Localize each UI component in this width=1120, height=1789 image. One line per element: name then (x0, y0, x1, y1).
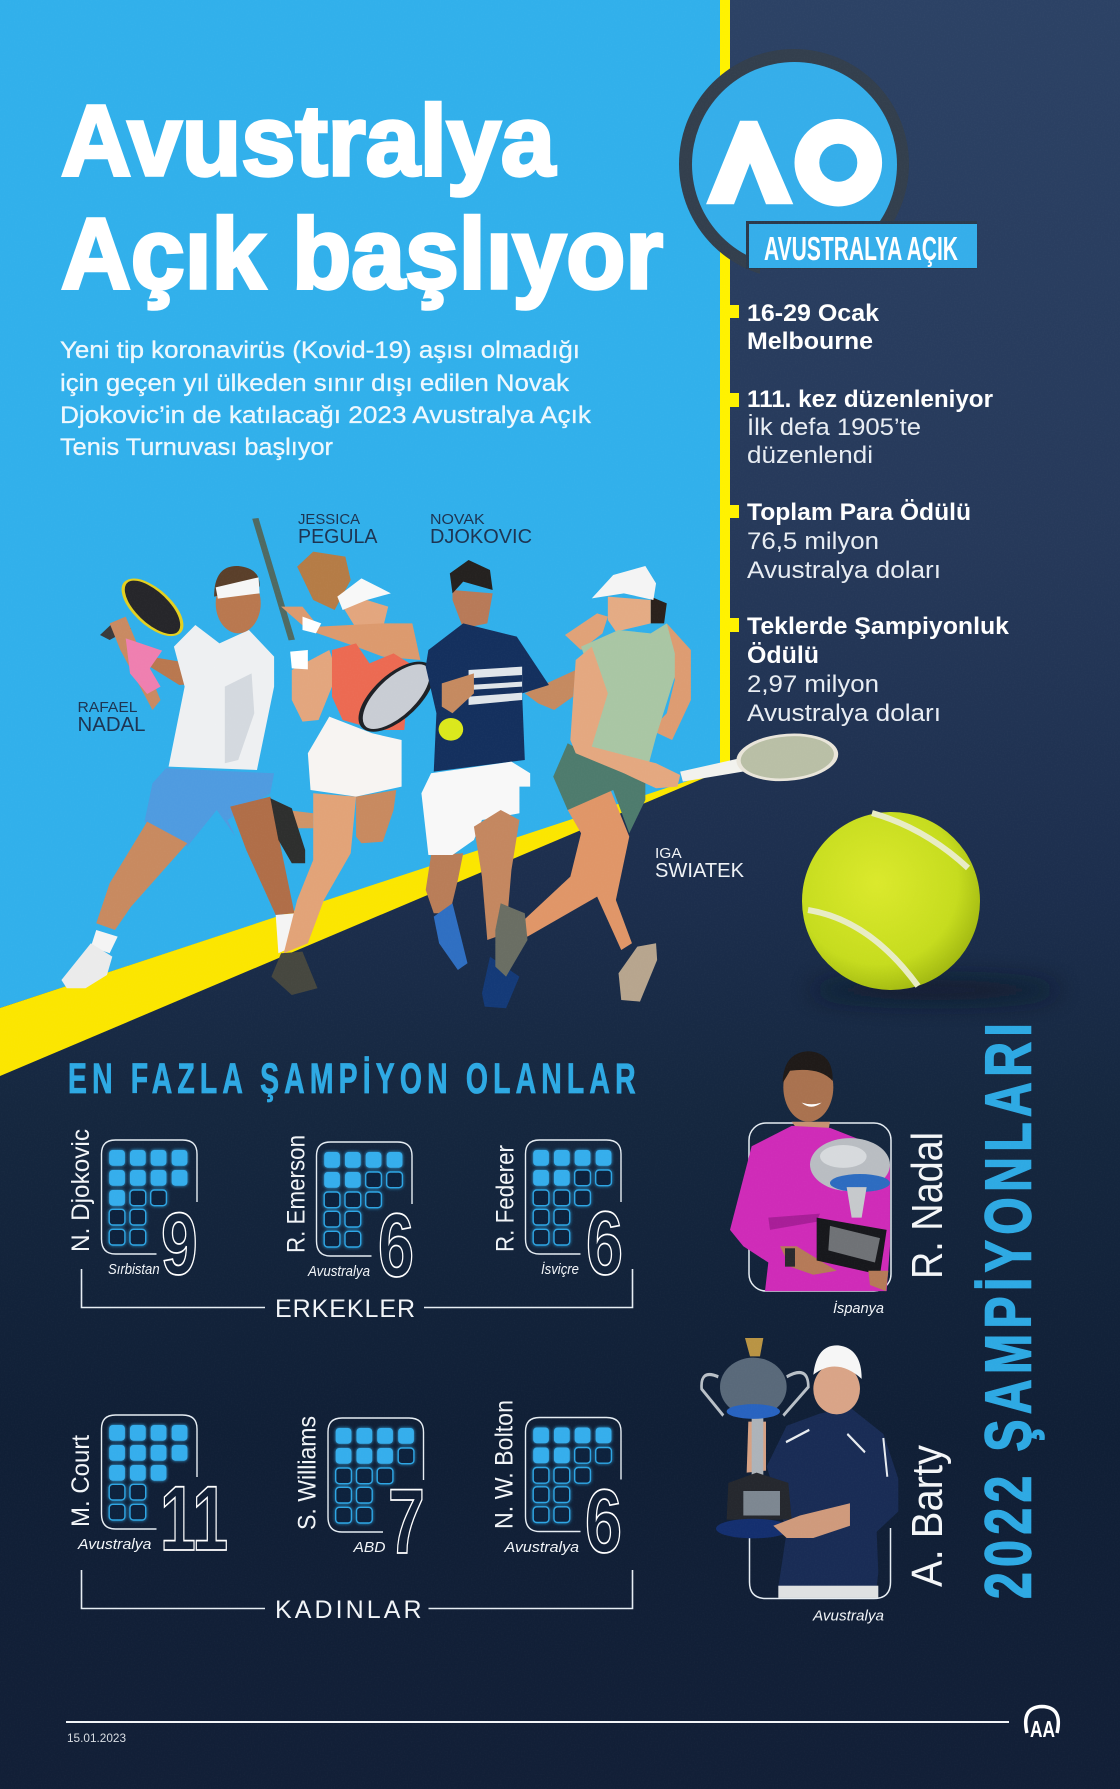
title (61, 85, 663, 310)
frame (750, 1528, 890, 1598)
title grid (316, 1142, 412, 1256)
fact: singles prize: Ödülü (747, 642, 819, 669)
card: M. Court: M. Court (67, 1435, 95, 1527)
card: N. W. Bolton: N. W. Bolton (491, 1400, 519, 1529)
footer rule (66, 1721, 1009, 1723)
caption: İspanya (833, 1300, 884, 1317)
bracket: men (82, 1269, 632, 1323)
label: Iga Swiatek (655, 845, 745, 882)
fact: edition (730, 386, 993, 469)
count: 11: 11 (160, 1467, 228, 1570)
logo label shadow (746, 221, 977, 269)
yellow diagonal court line (0, 767, 730, 1076)
frame (749, 1123, 891, 1291)
bracket: women (82, 1570, 632, 1624)
fact: total prize: Avustralya doları (747, 557, 941, 584)
name: A. Barty (903, 1445, 952, 1587)
card: S. Williams: S. Williams (294, 1416, 322, 1530)
ball shadow (810, 979, 1060, 1001)
tournament facts list (730, 300, 1010, 727)
count: 6: 6 (378, 1195, 414, 1296)
player: Swiatek (495, 566, 843, 1002)
players illustration (61, 518, 843, 1008)
logo label box (749, 224, 977, 268)
fact: total prize (730, 499, 971, 584)
card: N. W. Bolton (491, 1400, 622, 1571)
panel: blue header area (0, 0, 720, 1008)
title line 1: Avustralya (61, 85, 556, 197)
label: Iga Swiatek: IGA (655, 845, 682, 862)
fact: singles prize: Teklerde Şampiyonluk (747, 613, 1010, 640)
label: Jessica Pegula: PEGULA (298, 526, 378, 548)
logo letter A (706, 121, 793, 204)
count: 6: 6 (585, 1470, 622, 1571)
fact: dates: 16-29 Ocak (747, 300, 880, 327)
fact: dates: Melbourne (747, 328, 873, 355)
label: Rafael Nadal (78, 699, 146, 736)
name: R. Nadal (903, 1132, 952, 1279)
photo illustration: Barty with trophy (702, 1338, 898, 1598)
card: R. Federer (492, 1140, 623, 1293)
title line 2: Açık başlıyor (61, 198, 663, 310)
card: R. Emerson: R. Emerson (282, 1135, 310, 1253)
card: N. Djokovic: N. Djokovic (67, 1129, 95, 1252)
player: Djokovic (421, 560, 576, 1008)
photo illustration: Nadal with trophy (730, 1051, 890, 1291)
player: Pegula (255, 518, 446, 995)
heading: most titles: EN FAZLA ŞAMPİYON OLANLAR (68, 1054, 636, 1102)
footer date: 15.01.2023 (67, 1731, 126, 1745)
card: N. Djokovic: Sırbistan (108, 1261, 160, 1278)
label: Novak Djokovic: NOVAK (430, 511, 485, 528)
logo ring (679, 49, 909, 279)
fact: total prize: Toplam Para Ödülü (747, 499, 971, 526)
fact: singles prize: Avustralya doları (747, 700, 941, 727)
panel: 2022 champion A. Barty (702, 1338, 952, 1625)
logo: Australian Open (679, 49, 977, 279)
logo label text: AVUSTRALYA AÇIK (764, 230, 958, 267)
label: Novak Djokovic (430, 511, 532, 548)
bracket: men: ERKEKLER (275, 1295, 415, 1323)
count: 7: 7 (388, 1469, 425, 1573)
count: 6: 6 (586, 1192, 623, 1293)
label: Jessica Pegula: JESSICA (298, 511, 360, 528)
label: Rafael Nadal: NADAL (78, 714, 146, 736)
player: Nadal (61, 566, 296, 988)
logo letter O (807, 131, 870, 194)
intro paragraph: için geçen yıl ülkeden sınır dışı edilen Novak (60, 370, 570, 397)
fact: singles prize: 2,97 milyon (747, 671, 879, 698)
card: R. Emerson (282, 1135, 414, 1296)
fact: dates (730, 300, 880, 355)
title grid (102, 1415, 197, 1529)
intro paragraph: Tenis Turnuvası başlıyor (60, 434, 333, 461)
heading: 2022 champions, vertical: 2022 ŞAMPİYONLARI (973, 1023, 1045, 1599)
count: 9: 9 (161, 1196, 198, 1293)
bracket: women: KADINLAR (275, 1596, 422, 1624)
intro paragraph (60, 337, 592, 461)
fact: edition: düzenlendi (747, 442, 873, 469)
fact: singles prize (730, 613, 1010, 727)
card: R. Emerson: Avustralya (307, 1263, 370, 1280)
label: Rafael Nadal: RAFAEL (78, 699, 138, 716)
icon: agency logo: AA (1030, 1716, 1055, 1742)
card: R. Federer: R. Federer (492, 1145, 520, 1252)
title grid (328, 1418, 424, 1532)
label: Jessica Pegula (298, 511, 378, 548)
title grid (102, 1140, 197, 1254)
icon: tennis ball (802, 812, 1060, 1001)
fact: edition: İlk defa 1905’te (747, 414, 921, 441)
caption: Avustralya (812, 1608, 884, 1625)
label: Novak Djokovic: DJOKOVIC (430, 526, 532, 548)
title grid (526, 1140, 621, 1254)
fact: edition: 111. kez düzenleniyor (747, 386, 993, 413)
icon: agency logo (1026, 1706, 1058, 1742)
player name labels (78, 511, 745, 882)
yellow vertical line (720, 0, 730, 768)
logo disc (692, 62, 897, 267)
card: S. Williams (294, 1416, 425, 1573)
card: M. Court (67, 1415, 228, 1570)
card: M. Court: Avustralya (77, 1536, 151, 1553)
fact: total prize: 76,5 milyon (747, 528, 879, 555)
card: N. W. Bolton: Avustralya (503, 1539, 579, 1556)
title grid (526, 1418, 621, 1532)
intro paragraph: Djokovic’in de katılacağı 2023 Avustralya Açık (60, 402, 592, 429)
intro paragraph: Yeni tip koronavirüs (Kovid-19) aşısı olmadığı (60, 337, 580, 364)
card: S. Williams: ABD (352, 1539, 386, 1556)
panel: 2022 champion R. Nadal (730, 1051, 952, 1317)
card: R. Federer: İsviçre (541, 1261, 579, 1278)
card: N. Djokovic (67, 1129, 198, 1293)
label: Iga Swiatek: SWIATEK (655, 860, 745, 882)
